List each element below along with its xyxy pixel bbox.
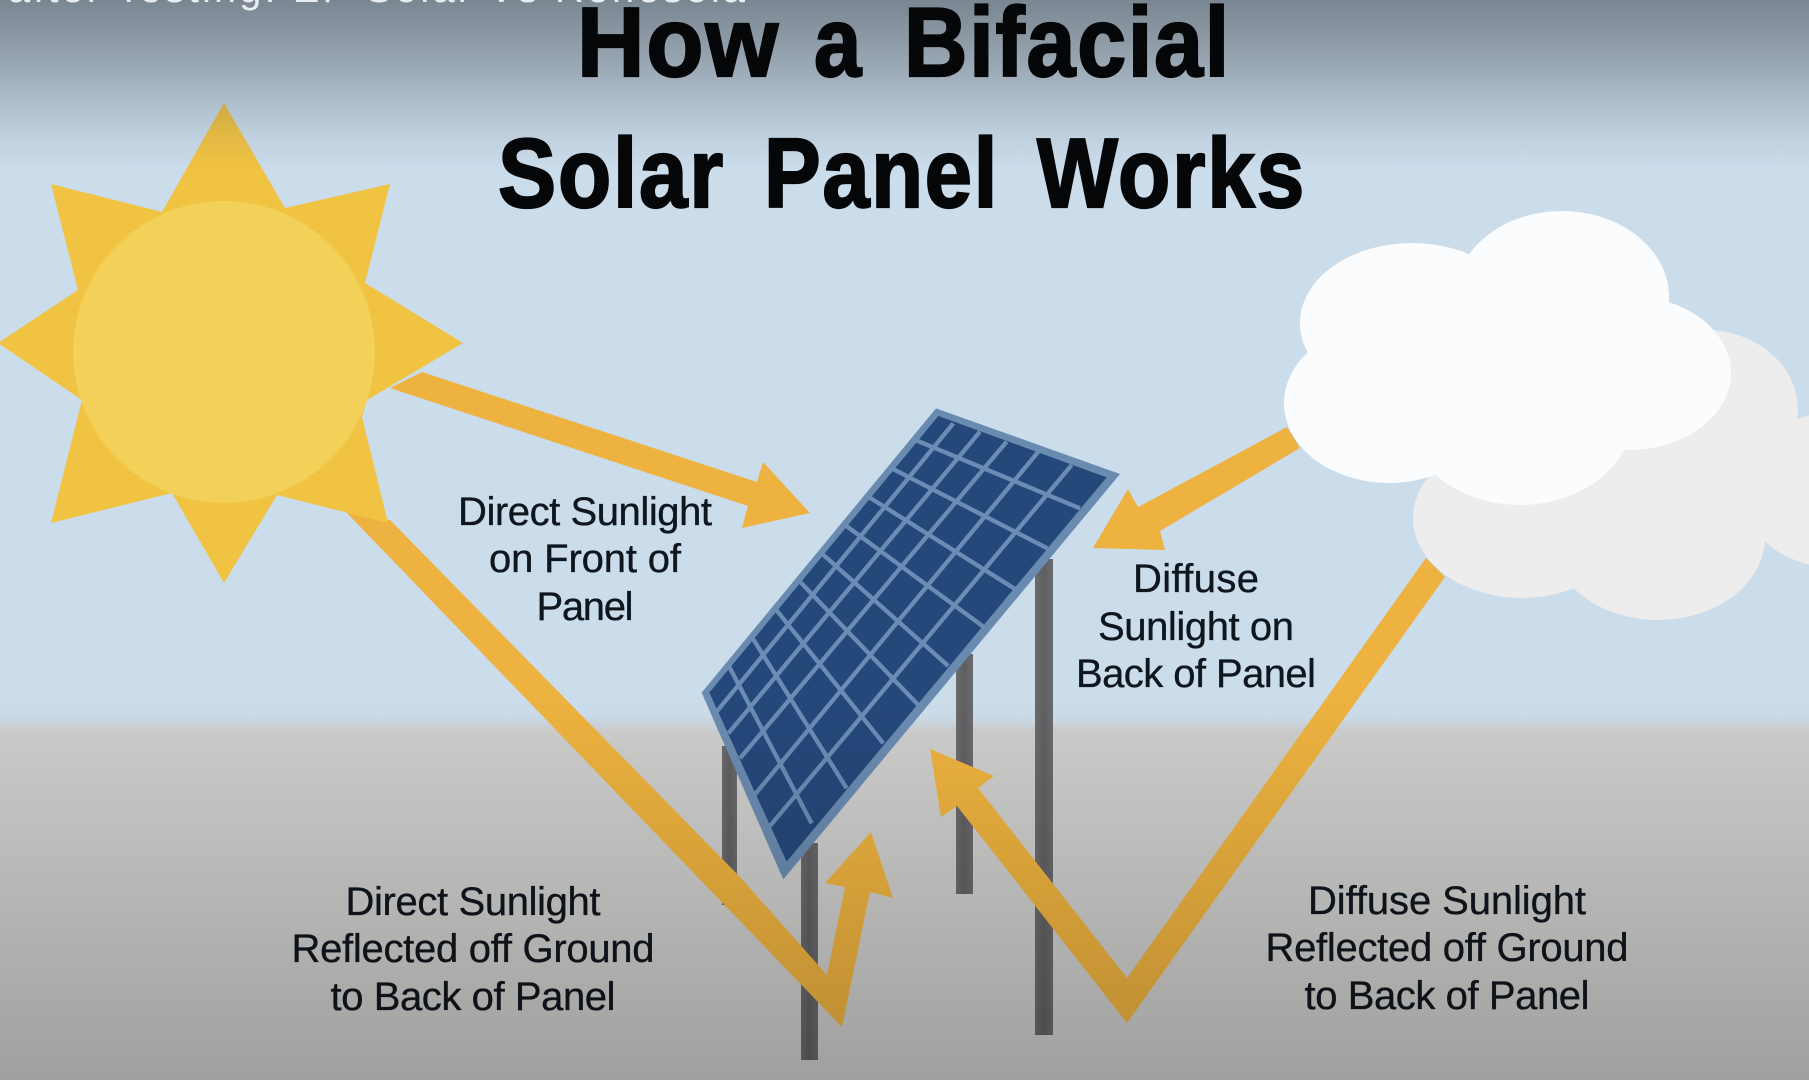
label: diffuse sunlight reflected: to Back of Panel	[1304, 974, 1590, 1018]
title: Solar	[498, 118, 725, 228]
label: direct sunlight on front: Direct Sunlight	[458, 490, 712, 534]
label: diffuse sunlight reflected	[1266, 879, 1628, 1018]
label: direct sunlight on front: Panel	[536, 585, 634, 629]
icon: grey back cloud	[1413, 330, 1809, 620]
sky background	[0, 0, 1809, 722]
bottom vignette	[0, 700, 1809, 1080]
arrow: direct sunlight reflected off ground to back of panel	[347, 513, 893, 1027]
label: direct sunlight reflected: Direct Sunlight	[346, 880, 600, 924]
top vignette	[0, 0, 1809, 170]
icon: solar panel	[702, 408, 1120, 879]
ground	[0, 716, 1809, 1080]
label: diffuse sunlight on back: Back of Panel	[1076, 652, 1316, 696]
label: direct sunlight reflected	[292, 880, 654, 1019]
label: diffuse sunlight on back: Sunlight on	[1098, 605, 1294, 649]
mounting posts	[722, 559, 1053, 1060]
title: Panel	[764, 118, 999, 228]
label: direct sunlight reflected: Reflected off Ground	[292, 927, 654, 971]
label: diffuse sunlight reflected: Reflected off Ground	[1266, 926, 1628, 970]
label: direct sunlight reflected: to Back of Panel	[330, 975, 616, 1019]
label: diffuse sunlight on back: Diffuse	[1133, 557, 1259, 601]
label: diffuse sunlight on back	[1076, 557, 1316, 696]
arrow: diffuse sunlight reflected off ground to back of panel	[930, 558, 1445, 1023]
arrow: diffuse sunlight on back of panel	[1093, 427, 1300, 550]
label: direct sunlight on front	[458, 490, 712, 629]
title: Works	[1037, 118, 1306, 228]
label: diffuse sunlight reflected: Diffuse Sunlight	[1308, 879, 1586, 923]
title	[498, 0, 1306, 228]
icon: sun	[0, 103, 463, 583]
arrow: direct sunlight on front of panel	[390, 372, 810, 528]
icon: white front cloud	[1284, 211, 1731, 505]
label: direct sunlight on front: on Front of	[489, 537, 682, 581]
